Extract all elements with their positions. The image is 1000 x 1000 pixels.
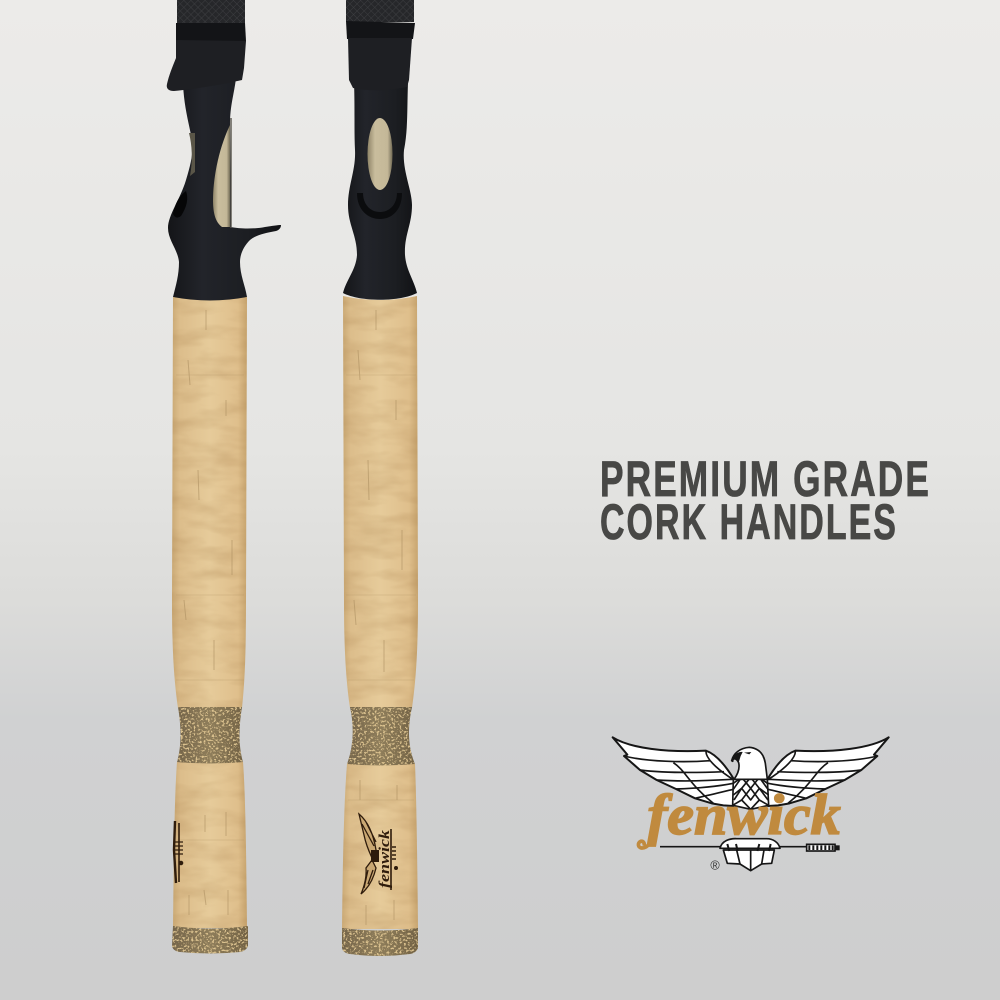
left rod: collar ring (176, 23, 246, 41)
left rod: cork blemishes (176, 310, 244, 915)
right rod: burl cork butt cap (342, 928, 418, 956)
logo: wordmark f tail (638, 830, 655, 848)
logo: right wing (767, 737, 889, 806)
right rod: hood cone (348, 38, 412, 90)
right rod: cork blemishes (346, 310, 416, 925)
rod butt cap (835, 845, 840, 850)
left rod: black reel seat (168, 78, 281, 302)
left rod: burl cork butt cap (172, 926, 248, 954)
left rod: hood cone (167, 40, 246, 91)
burned eagle wings (359, 814, 376, 894)
right rod: burl cork ring (347, 707, 415, 766)
logo: talons (720, 839, 780, 871)
left rod: burl cork ring (177, 707, 243, 764)
left rod: burned logo sliver (174, 821, 183, 883)
rod grip pattern (809, 845, 833, 850)
logo: beak and eye (732, 752, 751, 763)
left rod: side opening (173, 191, 187, 218)
left rod: window edge line (230, 118, 232, 228)
burned logo text: fenwick (377, 829, 393, 888)
right rod: trigger slot (357, 193, 402, 219)
rod shaft (660, 844, 807, 849)
right rod: cork upper section (343, 296, 418, 708)
left rod: cork lower section (173, 762, 247, 928)
right rod: textured grip (346, 0, 414, 22)
logo: eagle head (732, 747, 767, 779)
right rod: cork lower section (342, 764, 418, 929)
burned rod line (391, 829, 396, 890)
logo: registered mark: ® (710, 858, 720, 872)
burned eagle body (371, 850, 379, 862)
right rod: collar ring (346, 21, 415, 39)
right rod handle (342, 0, 418, 956)
right rod: reel seat window (368, 118, 392, 190)
burned dot (394, 866, 398, 870)
logo: body feathers (733, 777, 769, 809)
fenwick eagle logo (613, 737, 889, 872)
left casting rod handle (167, 0, 281, 954)
headline (600, 451, 931, 550)
logo: fishing rod (660, 844, 840, 851)
rod grip (807, 844, 835, 851)
logo: wordmark: fenwick (647, 784, 841, 847)
logo: left wing (613, 737, 734, 806)
left rod: cork upper section (172, 297, 247, 708)
right rod: burned fenwick logo (359, 814, 398, 894)
left rod: dark side slot (189, 133, 195, 176)
left rod: textured grip (177, 0, 245, 24)
right rod: black reel seat (343, 82, 417, 300)
left rod: reel seat window (213, 125, 230, 227)
